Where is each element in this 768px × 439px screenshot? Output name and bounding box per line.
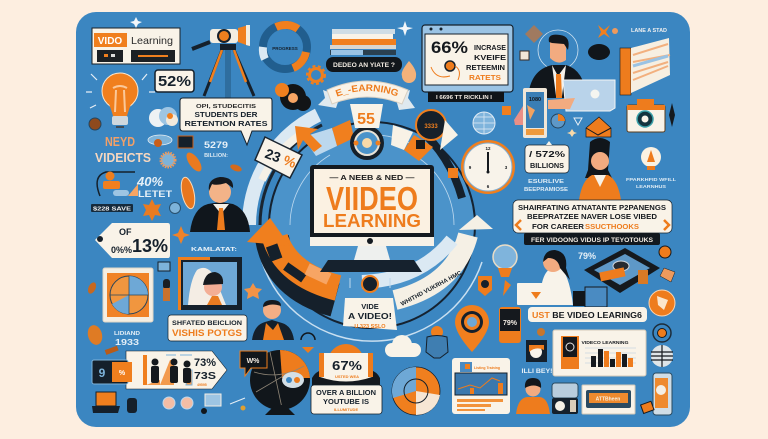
chart: people arrow banner: 49595 xyxy=(197,383,207,387)
clock: 9 xyxy=(469,165,472,170)
callout: career headline: BEEPRATZEE NAVER LOSE VIBED xyxy=(527,212,658,221)
callout: retention rates: STUDENTS DER xyxy=(194,112,258,119)
heading: E-Learning ribbon xyxy=(318,80,415,128)
icon: brain winged xyxy=(148,135,172,147)
icon: small laptop xyxy=(92,392,120,413)
chart: people arrow banner: 73S xyxy=(194,371,216,382)
icon: open book xyxy=(620,28,670,95)
icon: small bulb with caption: LEARNHUS xyxy=(636,184,666,189)
icon: orange gear and drop xyxy=(311,61,416,83)
text: lidiand xyxy=(114,331,140,347)
label: 228 save: $228 SAVE xyxy=(93,206,131,212)
tag: 13 percent: OF xyxy=(119,227,132,237)
caption: black pill: FER VIDOONG VIDUS IP TEYOTOUKS xyxy=(531,238,653,244)
device: phone xyxy=(514,88,547,138)
icon: small bulb with caption xyxy=(626,147,676,189)
stat: 5279 billion: 5279 xyxy=(204,140,228,150)
icon: orange light bulb xyxy=(86,73,155,127)
stack of books with caption: DEDEO AN YIATE ? xyxy=(333,62,395,69)
arrow: white curved up arrow xyxy=(362,215,493,308)
arrow: cursor xyxy=(295,126,322,152)
monitor stand and keyboard xyxy=(320,246,422,292)
icon: black hat xyxy=(588,44,610,60)
device: dark counter: % xyxy=(119,370,126,377)
chart: orange donut xyxy=(392,367,440,415)
icon: orange donut chart xyxy=(263,25,307,69)
person: boy orange xyxy=(516,378,550,414)
person: man orange suit xyxy=(252,300,294,340)
icon: framed face xyxy=(526,328,547,362)
clock: 6 xyxy=(487,184,490,189)
person: woman on laptop xyxy=(517,250,573,305)
stat: 66 percent retention monitor: 66% xyxy=(431,38,468,57)
card: 67 percent YouTube: OVER A BILLION xyxy=(316,390,376,397)
clock: 12 xyxy=(485,146,491,151)
stat: 572 percent billions: / 572% xyxy=(529,150,565,159)
card: 67 percent YouTube: YOUTUBE IS xyxy=(323,399,369,406)
icon: cloud xyxy=(385,335,421,357)
chart: people arrow banner: 73% xyxy=(194,357,216,369)
callout: career headline: SHAIRFATING ATNATANTE P2PANENGS xyxy=(518,203,666,212)
text: need videos heading: NEYD xyxy=(105,134,135,149)
person: man with laptop xyxy=(528,30,615,111)
icon: open book: LANE A STAD xyxy=(631,28,667,34)
icon: robot xyxy=(426,326,448,358)
pill: be video learning xyxy=(528,307,647,322)
icon: gear xyxy=(307,66,325,84)
device: dark counter: 9 xyxy=(99,366,106,380)
icon: camera on tripod xyxy=(192,25,254,98)
card: line and bar chart: Listing Training xyxy=(474,366,500,370)
icon: black splat badge xyxy=(275,83,311,111)
tag: 13 percent: 13% xyxy=(132,236,168,256)
icon: isometric device xyxy=(573,248,660,307)
device: phone: 1080 xyxy=(529,97,541,103)
stat: 40 percent: 40% xyxy=(136,174,163,189)
label: kamlatat: KAMLATAT: xyxy=(191,247,237,253)
callout: retention rates xyxy=(180,98,272,145)
icon: wireframe globe xyxy=(473,112,495,134)
card: 23 percent: 23 % xyxy=(263,145,299,171)
stat: 66 percent retention monitor: KVEIFE xyxy=(474,55,506,62)
card: orange button: ATTBheen xyxy=(596,396,620,402)
text: need videos heading xyxy=(95,134,151,165)
ring tiles and medallion xyxy=(303,110,458,178)
icon: orange world globe xyxy=(649,290,675,316)
stat: 5279 billion xyxy=(204,140,228,159)
text: lidiand: 1933 xyxy=(115,338,140,347)
text: illbey: ILLI BEY! xyxy=(522,368,552,375)
title: video learning: VIIDEO xyxy=(326,180,418,217)
text: lidiand: LIDIAND xyxy=(114,331,140,337)
stat: 40 percent: LETET xyxy=(138,189,173,199)
card: line and bar chart xyxy=(452,358,510,414)
pie chart card xyxy=(103,268,153,322)
stat: 66 percent retention monitor: INCRASE xyxy=(474,45,506,52)
callout: retention rates: RETENTION RATES xyxy=(184,121,268,128)
title: video learning: LEARNING xyxy=(323,211,421,231)
stat: 66 percent retention monitor: I 6696 TT RICKLIN I xyxy=(436,95,493,101)
icon: orange donut chart: PROGRESS xyxy=(272,46,298,51)
arrow: orange curved up arrow xyxy=(247,218,338,300)
card: orange button xyxy=(582,385,635,414)
framed portrait xyxy=(178,257,242,310)
person: woman in orange xyxy=(579,138,621,200)
callout: career headline xyxy=(513,200,672,233)
card: 67 percent YouTube: ILLUMITUDE xyxy=(334,407,358,412)
card: 67 percent YouTube: 67% xyxy=(332,358,362,373)
text: need videos heading: VIDEICTS xyxy=(95,150,151,165)
callout: a video: U 323 SSLO xyxy=(354,324,386,330)
icon: dark globe on stand: W% xyxy=(247,358,260,365)
tag: 13 percent: 0%% xyxy=(111,245,132,255)
clock: 3 xyxy=(505,165,508,170)
icon: leaf shell xyxy=(86,281,119,355)
ring tiles and medallion: 3333 xyxy=(424,124,438,130)
device: phone bottom right xyxy=(641,373,672,415)
callout: career headline: SSUCTHOOKS xyxy=(585,222,639,231)
stat: 572 percent billions: BILLIONS xyxy=(530,163,564,170)
decorations: right top icons xyxy=(502,25,618,115)
card: video learning logo: Learning xyxy=(131,35,173,47)
stat: 66 percent retention monitor: RATETS xyxy=(469,75,501,82)
main monitor with title xyxy=(310,165,434,246)
title: video learning: — A NEEB & NED — xyxy=(330,173,415,182)
icon: small globe xyxy=(170,202,180,214)
pill: be video learning: UST BE VIDEO LEARING6 xyxy=(532,310,642,320)
stat: 66 percent retention monitor: RETEEMIN xyxy=(466,65,505,72)
small character with orange star xyxy=(158,262,262,301)
person: man in suit xyxy=(190,177,250,232)
stat: 52 percent: 52% xyxy=(158,73,191,90)
icon: small black screen xyxy=(178,136,193,148)
card: video learning logo xyxy=(92,28,180,64)
icon: camera xyxy=(627,99,675,132)
arrow: white curved up arrow: WHITHD VUKRHA HMC xyxy=(400,270,464,308)
icon: map pin xyxy=(455,305,489,352)
tag: 13 percent xyxy=(95,223,170,258)
icon: sparkle top xyxy=(397,21,413,36)
callout: retention rates: OPI, STUDECITIS xyxy=(196,104,256,110)
callout: shared decision: SHFATED BEICLION xyxy=(172,320,242,327)
callout: shared decision: VISHIS POTGS xyxy=(172,328,242,338)
caption: black pill xyxy=(524,233,660,245)
stat: 5279 billion: BILLION: xyxy=(204,153,228,159)
callout: a video: VIDE xyxy=(361,302,379,311)
stat: 572 percent billions: BEEPRAMIOSE xyxy=(524,187,569,193)
stat: 79 percent: 79% xyxy=(578,251,596,261)
device: orange tablet xyxy=(499,307,521,343)
stack of books with caption xyxy=(326,29,402,72)
stat: 52 percent xyxy=(155,70,194,92)
card: 23 percent xyxy=(255,137,302,178)
icon: rockets xyxy=(179,150,243,210)
label: 228 save xyxy=(91,204,133,212)
icon: globe bulb xyxy=(478,245,517,296)
stat: 572 percent billions: ESURLIVE xyxy=(528,179,565,185)
device: orange tablet: 79% xyxy=(503,320,518,327)
stat: 40 percent xyxy=(136,174,173,199)
heading: E-Learning ribbon: E_-EARNING xyxy=(335,84,398,96)
icon: small bulb with caption: FPARKHFID WFILL xyxy=(626,177,676,182)
icon: orange sunburst xyxy=(161,153,175,167)
icon: swirl ball xyxy=(89,118,101,130)
callout: career headline: FOR CAREER xyxy=(532,222,585,231)
callout: a video xyxy=(343,298,397,330)
chart: people arrow banner xyxy=(126,351,227,389)
card: 67 percent YouTube: USTED WEA xyxy=(335,374,359,379)
icon: hands and small objects xyxy=(127,394,246,414)
icon: person on sofa xyxy=(97,172,138,196)
card: video learning logo: VIDO xyxy=(98,36,122,47)
card: video learning bar chart xyxy=(553,330,646,376)
central ring wheel xyxy=(249,115,482,341)
callout: shared decision xyxy=(168,315,247,341)
icon: headset xyxy=(301,333,315,353)
heading: E-Learning ribbon: 55 xyxy=(357,111,375,128)
icons: hex and card xyxy=(659,246,675,282)
title: video learning xyxy=(323,173,421,231)
card: video learning bar chart: VIDECO LEARNING xyxy=(582,340,629,345)
panel: blue background xyxy=(76,12,690,427)
icon: dark globe on stand xyxy=(240,350,310,415)
stat: 66 percent retention monitor xyxy=(422,25,513,102)
icon: cloud globe xyxy=(149,107,178,127)
icon: camera box xyxy=(552,383,578,414)
icon: spark orange xyxy=(172,226,190,244)
stat: 572 percent billions xyxy=(524,141,569,193)
card: 67 percent YouTube xyxy=(311,344,382,414)
callout: a video: A VIDEO! xyxy=(348,312,392,321)
icon: sparkle xyxy=(130,17,142,28)
icons: orbit and wire sphere xyxy=(651,324,673,367)
icons: globe triangle envelope xyxy=(551,114,611,137)
device: dark counter xyxy=(92,360,132,384)
clock xyxy=(461,140,515,194)
icon: star badge xyxy=(143,199,161,221)
